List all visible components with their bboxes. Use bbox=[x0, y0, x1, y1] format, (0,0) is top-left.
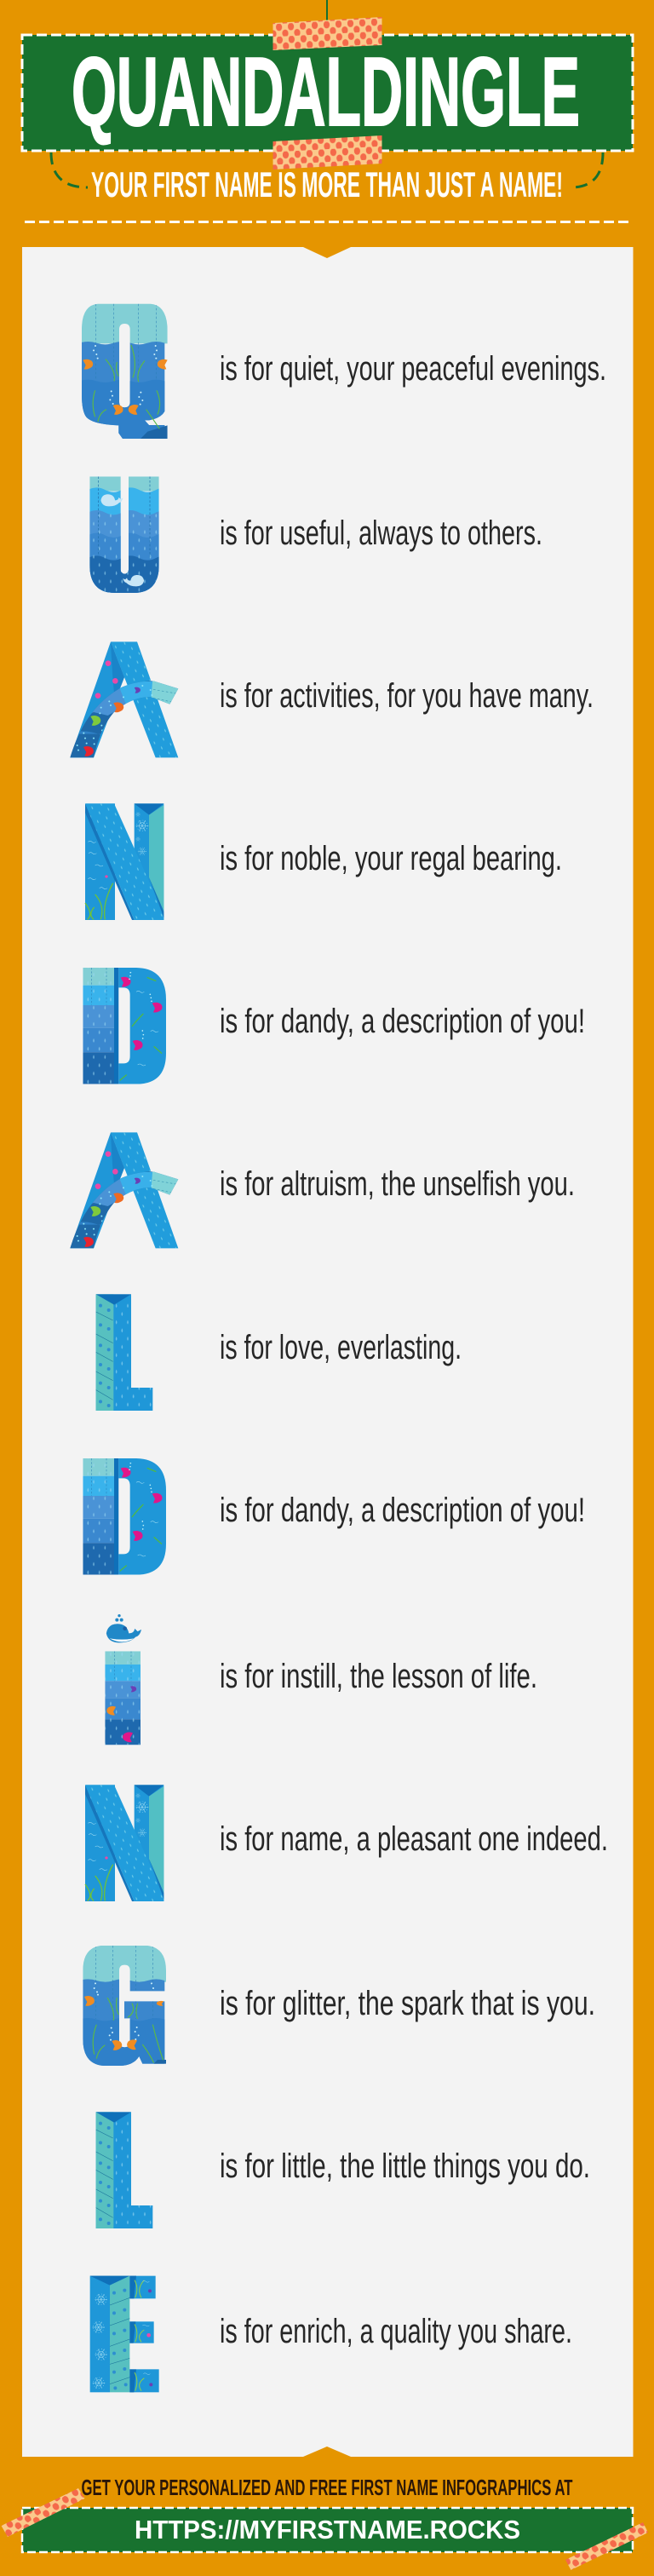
letter N bbox=[85, 1785, 164, 1901]
letter D bbox=[83, 968, 167, 1084]
icon: whale bbox=[106, 1614, 141, 1642]
letter N bbox=[85, 803, 164, 920]
title banner bbox=[22, 17, 633, 170]
letter Q bbox=[79, 301, 170, 440]
left hook bbox=[51, 152, 88, 187]
letter G bbox=[83, 1946, 166, 2066]
letter A bbox=[68, 641, 181, 761]
text row 7: is for love, everlasting. bbox=[220, 1329, 462, 1366]
letter A bbox=[68, 1132, 181, 1251]
tape: left bbox=[2, 2488, 85, 2537]
banner panel bbox=[22, 35, 633, 151]
right hook bbox=[571, 152, 603, 187]
letter E bbox=[90, 2276, 159, 2392]
letter D bbox=[83, 1458, 167, 1575]
hanging thread bbox=[326, 0, 328, 22]
letter L bbox=[96, 1294, 152, 1411]
letter L bbox=[96, 2112, 152, 2228]
url: HTTPS://MYFIRSTNAME.ROCKS bbox=[135, 2515, 520, 2544]
text row 9: is for instill, the lesson of life. bbox=[220, 1658, 537, 1695]
tape: bottom bbox=[272, 135, 382, 170]
tape: right bbox=[565, 2522, 648, 2570]
footer banner bbox=[2, 2488, 648, 2570]
subtitle with hooks bbox=[51, 152, 603, 204]
tape: top bbox=[272, 17, 382, 50]
letter U bbox=[89, 476, 159, 593]
banner panel bbox=[22, 2508, 633, 2552]
letter I with whale bbox=[105, 1614, 141, 1745]
